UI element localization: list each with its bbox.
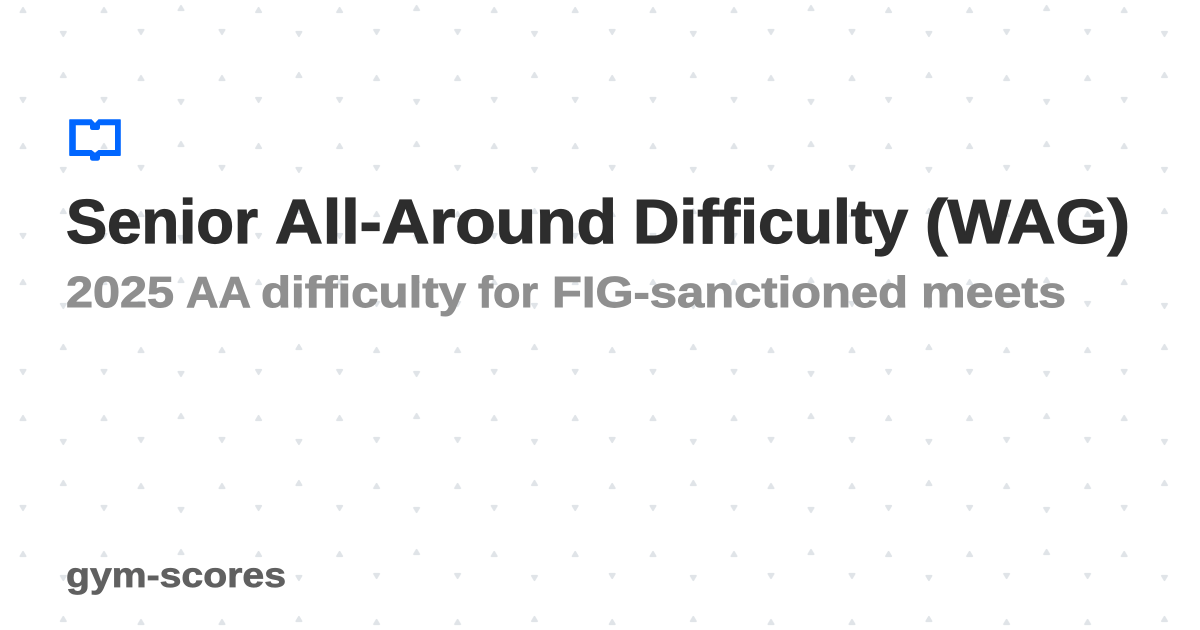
subtitle: AA — [186, 268, 251, 317]
subtitle: meets — [921, 268, 1066, 317]
title: All-Around — [275, 188, 617, 257]
title — [66, 188, 1130, 257]
subtitle: 2025 — [66, 268, 174, 317]
title: Difficulty — [633, 188, 909, 257]
subtitle: FIG-sanctioned — [552, 268, 908, 317]
icon: open book — [69, 119, 121, 161]
title: Senior — [66, 188, 258, 257]
title: (WAG) — [925, 188, 1130, 257]
subtitle — [66, 268, 1066, 317]
brand name: gym-scores — [66, 556, 286, 595]
subtitle: difficulty — [261, 268, 467, 317]
subtitle: for — [478, 268, 538, 317]
